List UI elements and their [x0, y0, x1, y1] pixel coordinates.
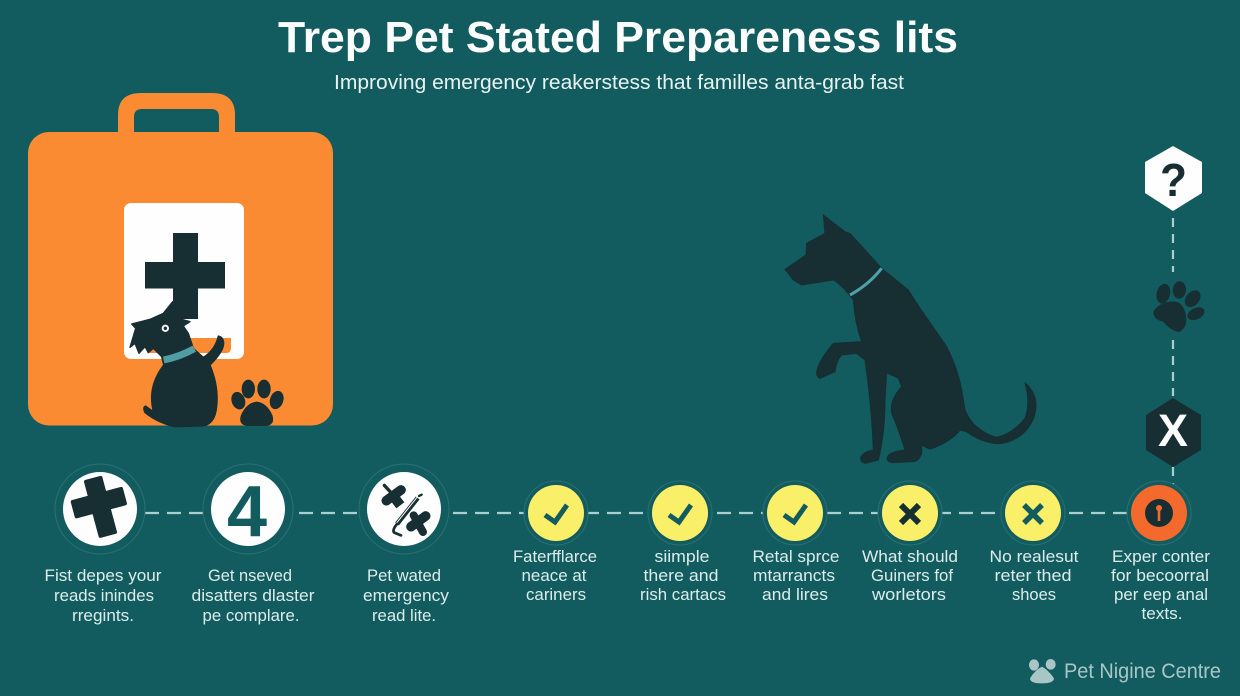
step 4 text: Faterfflarce	[513, 548, 597, 566]
icon: X hexagon	[1146, 398, 1201, 467]
title: Trep Pet Stated Prepareness lits	[278, 13, 958, 62]
case handle	[118, 93, 235, 137]
illustration: large dog silhouette	[785, 215, 1036, 463]
subtitle: Improving emergency reakerstess that familles anta-grab fast	[334, 72, 904, 94]
step 9: orange alert icon	[1127, 481, 1191, 545]
step 6 text: and lires	[762, 586, 828, 604]
large dog collar	[850, 268, 882, 295]
step 4: yellow check	[524, 481, 588, 545]
step 7 text: What should	[862, 548, 958, 566]
step 7 text: Guiners fof	[871, 567, 953, 585]
step 2 text: Get nseved	[208, 567, 292, 585]
step 6 text: Retal sprce	[752, 548, 840, 566]
vertical dashed connector	[1172, 218, 1174, 487]
icon: question hexagon	[1145, 146, 1202, 211]
step 3 text: Pet wated	[367, 567, 441, 585]
step 6: yellow check	[763, 481, 827, 545]
step 1 text: Fist depes your	[44, 567, 162, 585]
case body	[28, 132, 333, 426]
step 2: number four icon	[203, 464, 293, 554]
step 9 text: Exper conter	[1112, 548, 1211, 566]
small dog eye	[162, 325, 169, 332]
step 8 text: shoes	[1012, 586, 1056, 604]
white card	[124, 203, 244, 359]
small dog collar	[164, 349, 194, 360]
step 8 text: reter thed	[994, 567, 1072, 585]
step 2 text: pe complare.	[202, 607, 300, 625]
icon: X hexagon: X	[1158, 405, 1188, 456]
paw print on case	[229, 380, 286, 426]
step 7 text: worletors	[871, 586, 946, 604]
step 5 text	[640, 548, 726, 604]
step 6 text: mtarrancts	[753, 567, 835, 585]
orange strip on card	[148, 338, 231, 353]
step 9 text: per eep anal	[1114, 586, 1208, 604]
medical cross	[145, 233, 225, 319]
step 2: number four icon: 4	[227, 472, 267, 552]
step 3 text	[363, 567, 450, 625]
step 3 text: emergency	[363, 587, 450, 605]
step 9 text: for becoorral	[1111, 567, 1209, 585]
logo: paw and brand name: Pet Nigine Centre	[1064, 660, 1221, 683]
step 5 text: there and	[644, 567, 718, 585]
step 5 text: siimple	[654, 548, 710, 566]
step 3 text: read lite.	[372, 607, 436, 625]
step 4 text: neace at	[522, 567, 587, 585]
step 4 text: cariners	[526, 586, 586, 604]
step 1: cross icon	[55, 464, 145, 554]
step 1 text: rregints.	[72, 607, 134, 625]
illustration: orange first aid case with small dog	[28, 93, 333, 427]
step 9 text: texts.	[1142, 605, 1182, 623]
step 9 text	[1111, 548, 1211, 623]
step 4 text	[513, 548, 597, 604]
step 8 text	[990, 548, 1079, 604]
horizontal dashed timeline	[145, 512, 1128, 514]
step 2 text: disatters dlaster	[192, 587, 315, 605]
step 6 text	[752, 548, 840, 604]
step 7 text	[862, 548, 958, 604]
icon: paw on connector	[1153, 281, 1207, 332]
step 5 text: rish cartacs	[640, 586, 726, 604]
step 2 text	[192, 567, 315, 625]
step 3: crossed bones and tool icon	[359, 464, 449, 554]
step 7: yellow cross	[878, 481, 942, 545]
step 1 text: reads inindes	[54, 587, 154, 605]
step 8: yellow cross	[1001, 481, 1065, 545]
step 5: yellow check	[648, 481, 712, 545]
step 8 text: No realesut	[990, 548, 1079, 566]
step 1 text	[44, 567, 162, 625]
icon: question hexagon: ?	[1160, 154, 1187, 206]
small dog silhouette	[130, 302, 224, 427]
